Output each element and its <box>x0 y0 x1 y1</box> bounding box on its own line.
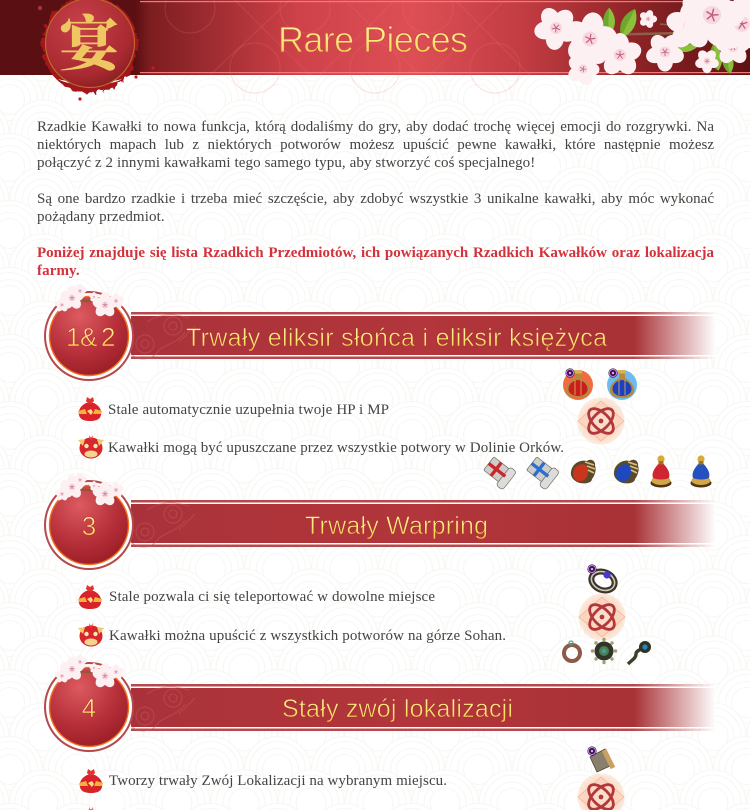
section 3 line 1: Tworzy trwały Zwój Lokalizacji na wybranym miejscu. <box>109 773 447 789</box>
red notice <box>37 245 714 279</box>
section 1 header: 2 <box>101 322 115 352</box>
section 2 line 2 <box>78 623 506 646</box>
intro paragraph: niektórych mapach lub z niektórych potworów możesz upuścić pewne kawałki, które następnie możesz <box>37 137 714 153</box>
section 3 result scroll <box>587 746 613 772</box>
section 3 line 1 <box>79 769 447 793</box>
section 2 header: 3 <box>82 511 96 541</box>
intro paragraph <box>37 119 714 171</box>
section 1 header: & <box>80 322 97 352</box>
section 1 line 1: Stale automatycznie uzupełnia twoje HP i MP <box>108 402 389 418</box>
section 3 line 2 icon <box>78 807 104 810</box>
section 3 sigil <box>578 774 624 810</box>
section 2 header <box>45 473 716 569</box>
section 2 line 2: Kawałki można upuścić z wszystkich potworów na górze Sohan. <box>109 628 506 644</box>
section 1 header: Trwały eliksir słońca i eliksir księżyca <box>186 324 607 352</box>
header blossoms <box>525 0 750 91</box>
header banner <box>0 0 750 93</box>
header seal <box>38 0 155 101</box>
red notice: farmy. <box>37 263 80 279</box>
section 3 header: 4 <box>82 693 96 723</box>
section 1 header: 1 <box>66 322 80 352</box>
section 1 pieces <box>481 455 712 490</box>
section 2 sigil <box>578 594 626 640</box>
section 1 header <box>45 284 716 380</box>
section 2 line 1 <box>78 585 435 609</box>
section 1 sigil <box>578 398 624 444</box>
section 1 line 2 <box>78 435 564 458</box>
intro paragraph: Rzadkie Kawałki to nowa funkcja, którą dodaliśmy do gry, aby dodać trochę więcej emocji do rozgrywki. Na <box>37 119 714 135</box>
red notice: Poniżej znajduje się lista Rzadkich Przedmiotów, ich powiązanych Rzadkich Kawałków oraz lokalizacja <box>37 245 714 261</box>
section 2 result ring <box>587 564 617 594</box>
section 2 pieces <box>564 638 651 664</box>
section 1 line 2: Kawałki mogą być upuszczane przez wszystkie potwory w Dolinie Orków. <box>108 440 564 456</box>
section 2 header: Trwały Warpring <box>305 512 488 540</box>
intro paragraph: połączyć z 2 innymi kawałkami tego samego typu, aby stworzyć coś specjalnego! <box>37 155 535 171</box>
second paragraph: Są one bardzo rzadkie i trzeba mieć szczęście, aby zdobyć wszystkie 3 unikalne kawałki, aby móc wykonać <box>37 191 714 207</box>
header title: Rare Pieces <box>278 19 468 60</box>
second paragraph <box>37 191 714 225</box>
section 3 header <box>45 655 716 751</box>
section 1 result potions <box>563 368 637 400</box>
section 1 line 1 <box>78 397 389 421</box>
second paragraph: pożądany przedmiot. <box>37 209 165 225</box>
section 3 header: Stały zwój lokalizacji <box>282 695 513 723</box>
section 2 line 1: Stale pozwala ci się teleportować w dowolne miejsce <box>109 589 435 605</box>
